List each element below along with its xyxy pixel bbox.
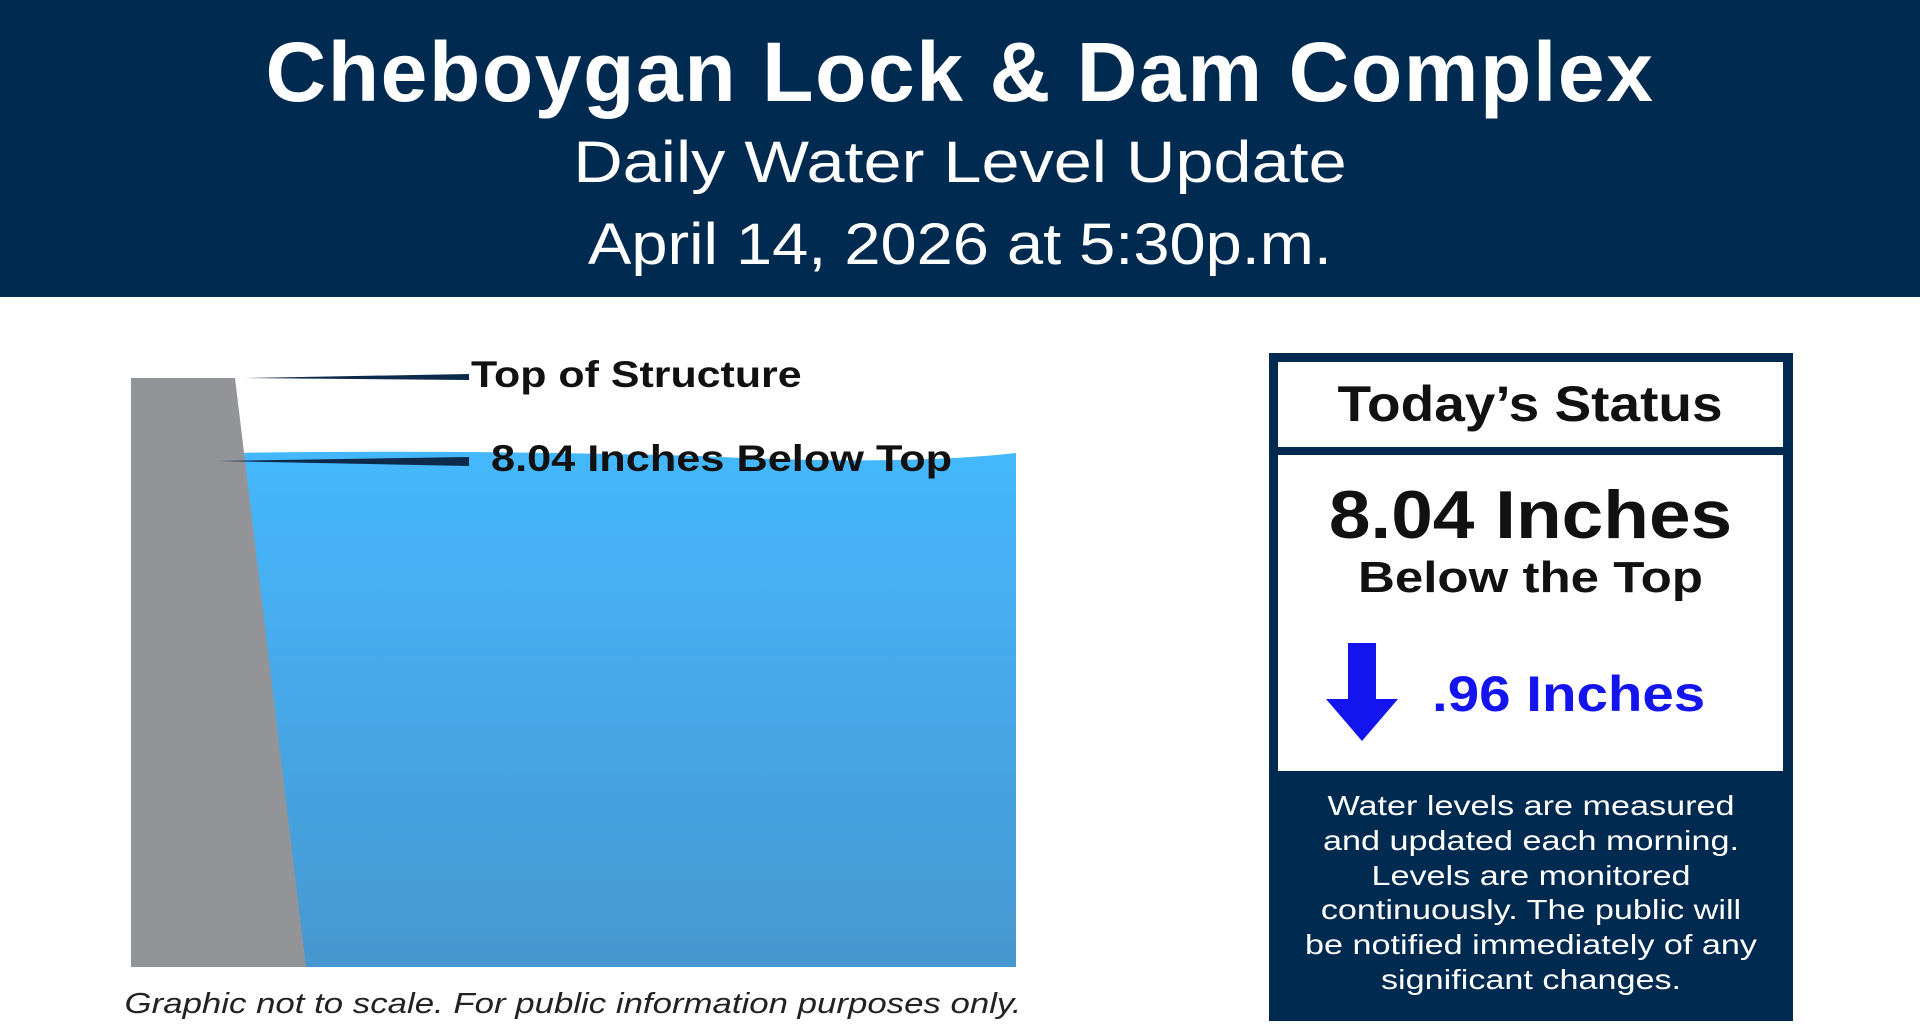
panel: today's status bbox=[1269, 353, 1793, 1021]
water bbox=[131, 452, 1016, 967]
status heading bbox=[1278, 362, 1783, 447]
note text: and updated each morning. bbox=[1323, 825, 1739, 856]
label: water level: 8.04 Inches Below Top bbox=[491, 438, 952, 479]
dam wall bbox=[131, 378, 306, 967]
main value: 8.04 Inches bbox=[1329, 477, 1732, 553]
note text: Water levels are measured bbox=[1328, 790, 1734, 821]
note text: significant changes. bbox=[1381, 964, 1681, 995]
subtitle: Daily Water Level Update bbox=[573, 130, 1347, 195]
title: Cheboygan Lock & Dam Complex bbox=[265, 25, 1655, 119]
date: April 14, 2026 at 5:30p.m. bbox=[588, 212, 1332, 277]
icon: down arrow bbox=[1326, 643, 1398, 741]
value subtitle: Below the Top bbox=[1358, 553, 1703, 602]
label: top of structure: Top of Structure bbox=[471, 354, 802, 395]
note text bbox=[1305, 790, 1757, 995]
pointer: water level bbox=[218, 457, 469, 466]
status heading: Today’s Status bbox=[1338, 376, 1723, 432]
note text: be notified immediately of any bbox=[1305, 929, 1757, 960]
status reading box bbox=[1278, 455, 1783, 771]
change value: .96 Inches bbox=[1432, 666, 1705, 722]
header banner bbox=[0, 0, 1920, 297]
pointer: top of structure bbox=[245, 374, 469, 380]
diagram: dam and water bbox=[131, 374, 1016, 967]
note text: continuously. The public will bbox=[1321, 894, 1741, 925]
caption: Graphic not to scale. For public information purposes only. bbox=[125, 988, 1021, 1020]
note text: Levels are monitored bbox=[1371, 860, 1690, 891]
